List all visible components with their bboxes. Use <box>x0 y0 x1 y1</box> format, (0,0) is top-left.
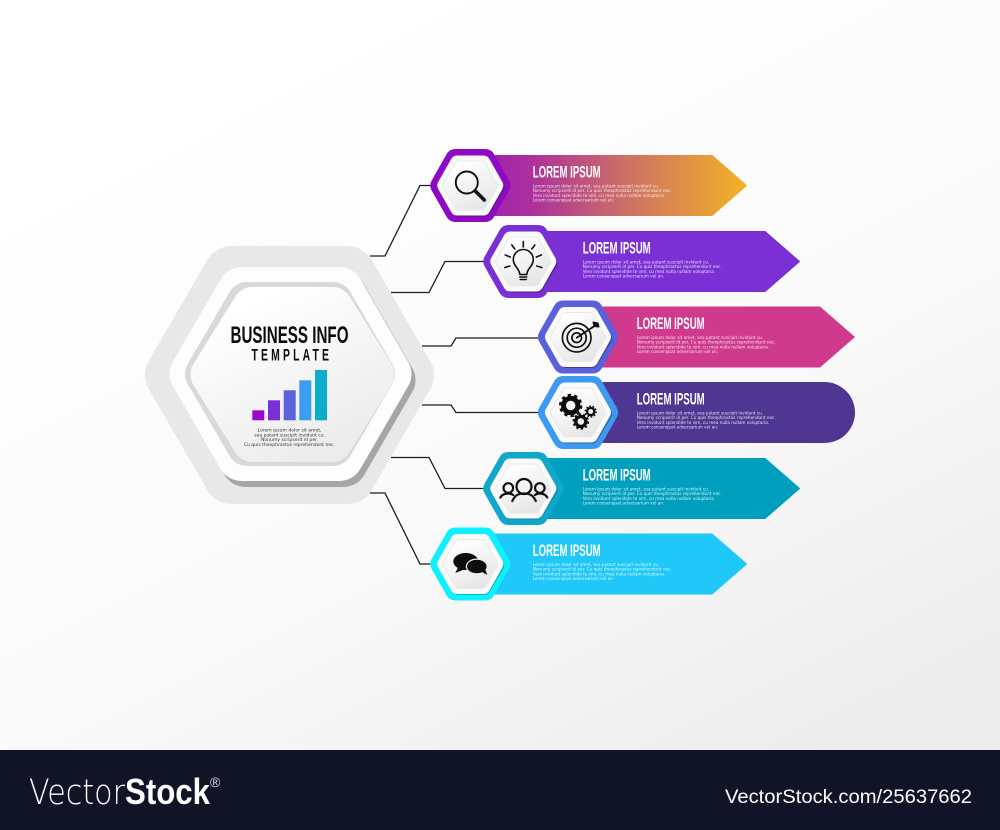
row 3 body: Nonumy scripserit id per. Cu quis theophrastus reprehendunt nec. <box>637 340 776 346</box>
row 1 body: Lorem consenquat adversarium vel an. <box>533 198 614 204</box>
row 2 body: Nonumy scripserit id per. Cu quis theophrastus reprehendunt nec. <box>583 264 722 270</box>
panel: row 1 <box>440 155 747 216</box>
footer id: VectorStock.com/25637662 <box>725 787 972 808</box>
icon: magnifier <box>456 172 484 200</box>
row 2 body: Lorem ipsum dolor sit amet, sea putant suscipit invidunt cu. <box>583 260 709 266</box>
row 1 body: Lorem ipsum dolor sit amet, sea putant suscipit invidunt cu. <box>533 184 659 190</box>
footer bar <box>0 750 1000 830</box>
row 5 body: Lorem ipsum dolor sit amet, sea putant suscipit invidunt cu. <box>583 486 709 492</box>
row 6 body <box>533 562 672 582</box>
row 6 title: LOREM IPSUM <box>533 541 601 560</box>
central body text: Nonumy scripserit id per. <box>261 437 318 443</box>
subheading: template: TEMPLATE <box>252 345 329 364</box>
row 3 body: Vero invidunt splendide te vim, cu mea nulla nullam voluptaria. <box>637 344 769 350</box>
row 4 body: Nonumy scripserit id per. Cu quis theophrastus reprehendunt nec. <box>637 415 776 421</box>
row 4 body: Lorem consenquat adversarium vel an. <box>637 425 718 431</box>
icon: light bulb <box>505 242 542 280</box>
icon: speech bubbles <box>453 553 488 575</box>
row 1 body <box>533 184 672 204</box>
row 4 body: Lorem ipsum dolor sit amet, sea putant suscipit invidunt cu. <box>637 410 763 416</box>
central body text: Lorem ipsum dolor sit amet, <box>258 428 322 434</box>
panel: row 5 <box>493 458 800 519</box>
heading: business info: BUSINESS INFO <box>230 322 348 349</box>
row 4 title: LOREM IPSUM <box>637 390 705 409</box>
icon: people <box>500 479 547 501</box>
panel: row 2 <box>493 231 800 292</box>
row 2 body: Vero invidunt splendide te vim, cu mea nulla nullam voluptaria. <box>583 269 715 275</box>
row 2 body <box>583 260 722 280</box>
footer registered mark: ® <box>210 774 221 790</box>
row 1 body: Vero invidunt splendide te vim, cu mea nulla nullam voluptaria. <box>533 193 665 199</box>
connector lines <box>370 186 539 564</box>
row 1 title: LOREM IPSUM <box>533 163 601 182</box>
row 5 body: Lorem consenquat adversarium vel an. <box>583 501 664 507</box>
row 2 title: LOREM IPSUM <box>583 239 651 258</box>
row 4 body: Vero invidunt splendide te vim, cu mea nulla nullam voluptaria. <box>637 420 769 426</box>
row 4 body <box>637 410 776 431</box>
row 6 body: Lorem ipsum dolor sit amet, sea putant suscipit invidunt cu. <box>533 562 659 568</box>
row 6 body: Lorem consenquat adversarium vel an. <box>533 576 614 582</box>
icon: target <box>562 322 599 352</box>
panel: row 4 <box>548 382 855 443</box>
row 3 body: Lorem ipsum dolor sit amet, sea putant suscipit invidunt cu. <box>637 335 763 341</box>
row 5 body: Vero invidunt splendide te vim, cu mea nulla nullam voluptaria. <box>583 496 715 502</box>
row 5 body: Nonumy scripserit id per. Cu quis theophrastus reprehendunt nec. <box>583 491 722 497</box>
panel: row 3 <box>548 306 855 368</box>
row 2 body: Lorem consenquat adversarium vel an. <box>583 274 664 280</box>
panel: central hexagon <box>173 274 406 476</box>
row 5 body <box>583 486 722 507</box>
bar chart <box>252 370 327 420</box>
central body text: Cu quis theophrastus reprehendunt nec. <box>244 442 335 448</box>
icon: gears <box>560 395 596 429</box>
panel: row 6 <box>440 534 747 594</box>
row 3 body <box>637 335 776 355</box>
central body text: sea putant suscipit invidunt cu. <box>254 432 325 438</box>
row 1 body: Nonumy scripserit id per. Cu quis theophrastus reprehendunt nec. <box>533 188 672 194</box>
row 6 body: Vero invidunt splendide te vim, cu mea nulla nullam voluptaria. <box>533 571 665 577</box>
central body text <box>244 428 335 448</box>
footer logo bold part: Stock <box>125 771 211 812</box>
footer logo: Vector <box>29 773 126 813</box>
row 6 body: Nonumy scripserit id per. Cu quis theophrastus reprehendunt nec. <box>533 567 672 573</box>
row 5 title: LOREM IPSUM <box>583 466 651 485</box>
row 3 body: Lorem consenquat adversarium vel an. <box>637 349 718 355</box>
row 3 title: LOREM IPSUM <box>637 314 705 333</box>
